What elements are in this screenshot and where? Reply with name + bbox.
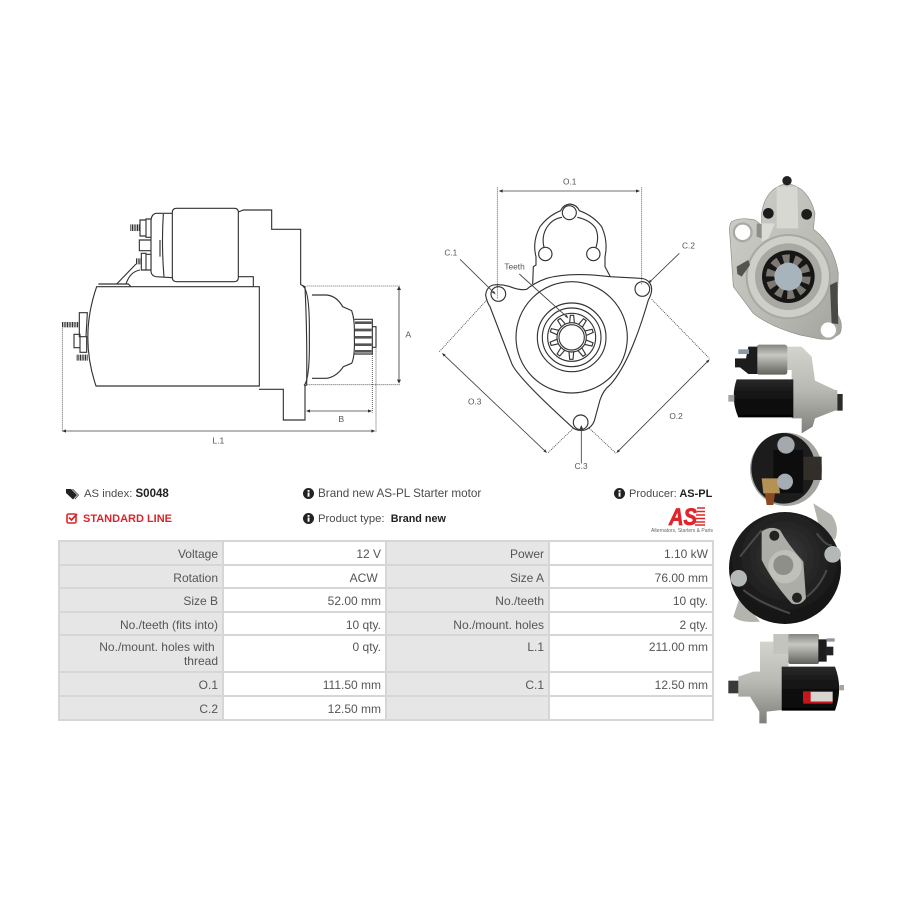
specification table: 10 qty. — [346, 618, 381, 632]
specification table: C.1 — [525, 678, 544, 692]
dimension labels: O.1 — [563, 177, 577, 187]
dimension labels: Teeth — [504, 261, 525, 271]
solenoid body — [139, 208, 238, 282]
icon: info — [303, 488, 314, 499]
specification table: Rotation — [173, 570, 218, 584]
dimension labels: O.3 — [468, 396, 482, 406]
specification table: thread — [184, 654, 218, 668]
dimension lines — [62, 286, 401, 433]
housing and mounting flange — [98, 210, 307, 420]
specification table: No./teeth (fits into) — [120, 618, 218, 632]
dimension labels: A — [405, 329, 411, 339]
info: description: Brand new AS-PL Starter motor — [318, 487, 481, 500]
specification table: 111.50 mm — [323, 678, 381, 692]
specification table: 10 qty. — [673, 594, 708, 608]
solenoid terminals — [117, 219, 151, 284]
info: producer: Producer: AS-PL — [629, 488, 712, 500]
icon: info — [614, 488, 625, 499]
rear bolts — [62, 313, 88, 358]
specification table: 1.10 kW — [664, 547, 708, 561]
info row: AS index: AS index: S0048 — [84, 488, 169, 500]
specification table: Size A — [510, 570, 544, 584]
specification table: 12 V — [356, 547, 381, 561]
specification table: O.1 — [199, 678, 218, 692]
photo: front view of starter — [729, 176, 841, 340]
dimension labels: O.2 — [669, 411, 683, 421]
specification table: L.1 — [527, 640, 544, 654]
specification table: No./teeth — [495, 594, 544, 608]
AS logo: Alternators, Starters & Parts — [651, 528, 713, 534]
photo: rear view of starter — [729, 433, 841, 624]
specification table: Power — [510, 547, 544, 561]
dimension labels: C.3 — [575, 461, 588, 471]
photo: side view of starter — [728, 345, 843, 433]
specification table — [58, 540, 714, 721]
specification table: 12.50 mm — [655, 678, 708, 692]
specification table: 76.00 mm — [655, 570, 708, 584]
specification table: 2 qty. — [680, 618, 708, 632]
info: product type: Product type: Brand new — [318, 513, 446, 525]
icon: red check box — [66, 513, 78, 524]
specification table: 0 qty. — [353, 640, 381, 654]
icon: info — [303, 513, 314, 524]
info row: standard line: STANDARD LINE — [83, 513, 172, 525]
AS logo — [651, 505, 713, 534]
rear tower outline — [533, 204, 611, 284]
icon: tags — [66, 489, 79, 500]
specification table: 211.00 mm — [649, 640, 708, 654]
specification table: C.2 — [199, 702, 218, 716]
pinion nose — [303, 286, 376, 385]
specification table: ACW — [350, 570, 378, 584]
photo: opposite side view of starter — [728, 634, 844, 723]
pinion rings and teeth — [516, 282, 627, 393]
dimension lines — [439, 187, 710, 463]
mounting plate outline — [486, 275, 652, 430]
specification table: No./mount. holes — [453, 618, 544, 632]
dimension labels: L.1 — [212, 436, 225, 446]
mounting holes — [491, 282, 650, 430]
dimension labels: C.2 — [682, 241, 695, 251]
specification table: 52.00 mm — [328, 594, 381, 608]
specification table: Voltage — [178, 547, 218, 561]
dimension labels — [212, 329, 411, 446]
motor can — [88, 287, 259, 386]
specification table: Size B — [183, 594, 218, 608]
dimension labels: B — [338, 414, 344, 424]
dimension labels — [444, 177, 695, 471]
specification table: No./mount. holes with — [99, 640, 215, 654]
dimension labels: C.1 — [444, 247, 458, 257]
specification table: 12.50 mm — [328, 702, 381, 716]
